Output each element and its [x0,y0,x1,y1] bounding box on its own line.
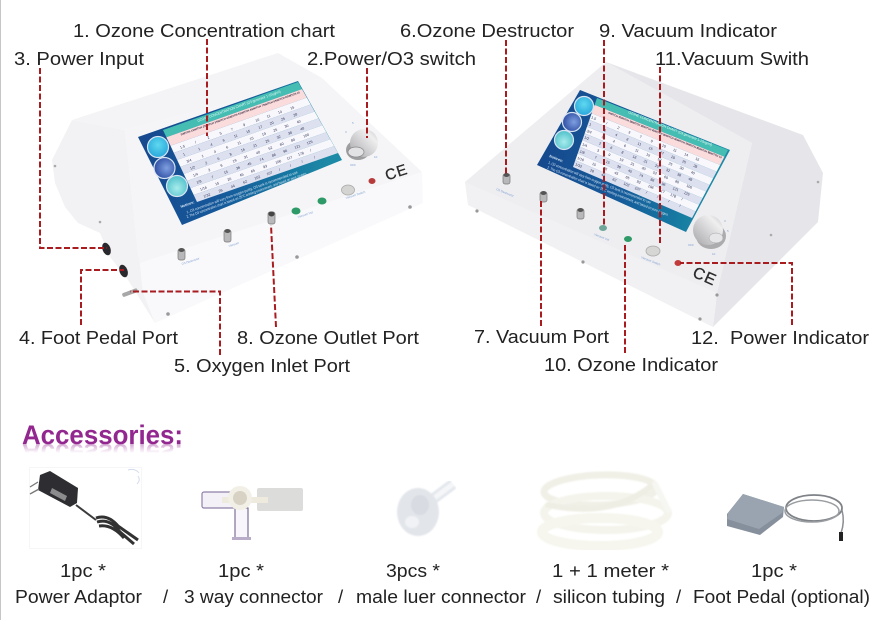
accessory quantities and names: Power Adaptor [15,586,142,607]
chart screen right: 32 [665,168,671,173]
chart screen left: 44 [230,184,235,189]
heading: accessories: Accessories: [22,438,183,468]
knob left: 5 [352,121,354,125]
knob left: 10 [374,155,378,159]
chart screen left: SWITCH 7 [251,103,264,111]
chart screen right: 1 [589,123,592,127]
chart screen left: 107 [266,171,273,176]
chart screen left: SWITCH 10 [286,90,301,99]
chart screen left: SWITCH 9 [274,95,288,103]
chart screen right: 11 [637,142,642,147]
chart screen left: 31 [243,155,249,160]
chart screen right: 26 [603,166,608,172]
chart screen left: 36 [236,166,241,171]
chart screen right: 52 [652,171,657,176]
chart screen left: 3/4 [186,158,192,164]
chart screen left: 100 [303,133,310,139]
ports and indicators left [54,165,412,316]
chart screen right: 5 [628,130,631,135]
chart screen left: 9 [220,164,223,168]
ports and indicators left: Vacuum Switch [345,190,366,200]
chart screen left: 1/16 [200,186,207,192]
chart screen left: 80 [291,138,296,143]
accessory quantities and names: male luer connector [356,586,526,607]
chart screen right: 7 [639,135,642,139]
chart screen left: 28 [293,112,298,118]
chart screen left: 15 [223,170,228,175]
chart screen left: 11 [237,141,242,146]
chart screen right: 16 [632,155,637,160]
chart screen right: 7 [594,155,597,160]
chart screen left: 30 [284,124,289,129]
chart screen right: 93 [636,180,641,185]
chart screen right: / [681,197,683,201]
chart screen right: 121 [672,186,679,192]
callout labels [14,20,869,376]
chart screen left: 60 [279,142,284,147]
accessory quantities and names: 1pc * [60,560,106,581]
chart screen left: / [313,155,316,160]
chart screen left: 4 [213,150,217,154]
chart screen left: / [290,164,292,168]
chart screen left: 7 [211,175,214,179]
chart screen left: 96 [283,149,288,154]
chart screen right: 15 [605,160,610,165]
chart screen right: SWITCH 8 [686,142,699,150]
chart screen right: 117 [658,188,665,194]
chart screen right: 6 [610,146,613,150]
chart screen left: 4 [210,143,213,147]
chart screen right: 28 [693,164,698,169]
icon: 3 way connector [202,486,303,540]
chart screen left: 11 [233,134,238,139]
chart screen left: / [301,160,303,164]
chart screen right: 107 [634,186,641,192]
chart screen right: / [656,195,659,199]
chart screen left [138,81,342,225]
chart screen left: 15 [215,181,220,186]
chart screen right: 1/8 [579,150,585,155]
chart screen right: 40 [690,170,695,176]
chart screen right: 30 [679,166,684,171]
ports and indicators right [475,173,819,321]
chart screen left: 25 [265,139,270,144]
chart screen left: OZONE CONCENTRATION CHART (O3 generator 1-10ug/ml) [197,90,281,123]
chart screen left: SWITCH 1 [180,128,194,136]
chart screen left: 65 [250,169,256,174]
chart screen right: 125 [683,191,690,197]
chart screen left: 1.5 [180,144,186,150]
chart screen left: 1/8 [196,179,202,185]
knob right: 3 [724,219,726,223]
chart screen right: 2 [598,141,602,146]
chart screen left: 17 [258,125,263,130]
chart screen left: 102 [254,175,261,181]
callout labels: 1. Ozone Concentration chart [73,20,335,41]
chart screen right: 10 [661,144,666,149]
chart screen left: 2 [205,161,208,165]
chart screen right: 3 [596,148,600,153]
chart screen right: OZONE CONCENTRATION CHART (O3 generator 1-10ug/ml) [628,110,713,147]
icon: foot pedal [727,494,843,541]
chart screen right: SWITCH 4 [641,124,655,132]
chart screen left: 14 [278,110,283,115]
knob right [688,215,729,256]
chart screen left: 6 [222,138,225,143]
chart screen right: 15 [648,146,653,151]
callout labels: 3. Power Input [14,48,144,69]
accessory quantities and names: 1pc * [751,560,797,581]
ports and indicators left: Vacuum [228,241,240,248]
chart screen right: SWITCH 7 [675,137,688,146]
chart screen left: 26 [218,188,223,193]
chart screen right: 80 [675,179,680,185]
chart screen right: SWITCH 2 [619,115,632,124]
chart screen left: 25 [281,117,286,122]
ports and indicators right: Vacuum Ind [594,232,610,242]
chart screen right: 100 [686,184,693,190]
chart screen right [537,90,730,232]
callout labels: 8. Ozone Outlet Port [237,327,419,348]
chart screen right: SWITCH 10 [708,150,723,159]
chart screen right: 60 [663,175,669,180]
accessory quantities and names: 1pc * [218,560,264,581]
chart screen right: 4 [612,139,615,144]
chart screen left: 121 [294,144,301,150]
chart screen left: SWITCH 3 [204,120,217,128]
chart screen right: 1/4 [582,143,588,148]
chart screen left: / [278,168,281,172]
chart screen left: 1 [183,152,186,157]
chart screen left: 6 [226,145,229,150]
callout labels: 5. Oxygen Inlet Port [174,355,350,376]
chart screen right: 15 [646,153,651,158]
ports and indicators left: O3 Destructor [181,256,200,266]
knob right: 10 [712,252,716,256]
chart screen left: 1 [201,154,204,158]
chart screen left: 40 [296,119,301,125]
chart screen left: 62 [243,180,248,185]
chart screen right: 2 [617,126,620,130]
chart screen left: 25 [273,128,278,133]
chart screen left: 11 [266,114,271,119]
chart screen left: 21 [253,143,258,148]
chart screen left: 8 [229,152,232,157]
chart screen right: 74 [639,173,644,178]
chart screen left: SWITCH 8 [262,99,276,107]
knob right: 5 [727,229,729,233]
chart screen right: 1/2 [584,136,590,141]
chart screen right: 25 [682,159,687,165]
chart screen left: 7 [230,127,234,132]
chart screen right: 36 [616,164,621,169]
chart screen right: / [645,191,648,195]
chart screen left: 86 [271,153,277,158]
accessory quantities and names: / [536,586,542,607]
knob right: OFF [688,243,694,247]
chart screen left: 6 [217,157,220,161]
knob left: 3 [345,130,347,134]
chart screen right: 44 [601,173,606,178]
chart screen right: 48 [688,177,693,182]
callout labels: 4. Foot Pedal Port [19,327,178,348]
chart screen right: 25 [654,164,659,169]
chart screen left: 32 [276,135,281,140]
chart screen right: 11 [634,148,639,153]
heading: accessories [22,420,183,468]
chart screen left: 125 [306,140,313,146]
chart screen left: Notices: [180,200,195,209]
accessory quantities and names: / [676,586,682,607]
chart screen right: 65 [625,175,630,180]
chart screen right: 1 [601,135,604,139]
CE mark right: CE [690,264,719,290]
accessory quantities and names: silicon tubing [553,586,665,607]
chart screen right: SWITCH 3 [630,120,643,128]
chart screen left: SWITCH 6 [239,107,252,115]
chart screen right: SWITCH 6 [663,133,677,141]
CE mark left: CE [383,161,410,184]
chart screen right: 25 [668,161,673,167]
callout labels: 6.Ozone Destructor [400,20,574,41]
chart screen right: SWITCH 1 [608,111,621,119]
chart screen left: 106 [275,159,282,165]
device: front-right view [465,62,823,327]
chart screen right: 9 [608,153,611,157]
chart screen left: SWITCH 5 [227,112,241,120]
chart screen left: 20 [269,121,274,126]
chart screen right: 20 [670,155,676,160]
chart screen right: 1 [603,128,607,133]
chart screen left: 178 [298,151,304,157]
chart screen left: 15 [249,136,254,141]
chart screen left: 1/2 [190,165,196,171]
chart screen left: 15 [290,105,295,111]
accessory quantities and names: / [338,586,344,607]
icon: silicon tubing [542,473,668,546]
heading: accessories: Accessories: [22,420,183,450]
ports and indicators right: Vacuum Switch [641,255,661,267]
chart screen right: 11 [672,148,677,153]
chart screen right: 19 [619,157,624,162]
chart screen right: 15 [695,157,700,162]
chart screen left: 117 [286,155,293,161]
chart screen left: / [195,140,197,144]
callout labels: 9. Vacuum Indicator [599,20,777,41]
chart screen right: 45 [627,169,633,174]
chart screen right: 26 [589,168,595,174]
accessory quantities and names: / [163,586,169,607]
chart screen right: Notices: [549,154,564,163]
chart screen left: 26 [227,177,232,182]
chart screen right: 106 [647,184,654,190]
chart screen left: 1/4 [193,172,199,178]
chart screen left: SWITCH 2 [192,124,205,132]
chart screen left: 48 [300,126,305,132]
chart screen left: / [310,148,312,153]
chart screen left: 74 [259,157,264,162]
leader lines [40,39,792,355]
chart screen right: SWITCH 9 [697,146,710,155]
chart screen left: 10 [255,118,260,123]
chart screen left: 1/32 [203,193,211,199]
chart screen right: 17 [659,151,664,156]
device body left [52,53,423,323]
chart screen right: 96 [661,182,666,187]
chart screen right: 8 [621,150,624,155]
chart screen right: 6 [626,137,629,142]
chart screen left: 52 [268,146,273,151]
chart screen right: 102 [623,182,630,188]
chart screen left: 9 [243,123,246,127]
chart screen right: 21 [643,159,648,164]
chart screen right: 6 [623,144,627,148]
accessory quantities and names: 1 + 1 meter * [552,560,669,581]
callout labels: 2.Power/O3 switch [307,48,476,69]
knob left [345,121,378,167]
chart screen right: SWITCH 5 [652,128,666,137]
accessory quantities and names [15,560,870,607]
callout labels: 11.Vacuum Swith [655,48,809,69]
chart screen left: 19 [261,132,267,137]
chart screen right: 1/16 [577,156,585,162]
chart screen right: 2. The O3 concentration chart is based on 25°C working environment, and based on pure oxygen. [547,166,669,217]
device: front-left view [52,53,423,323]
accessory quantities and names: 3 way connector [184,586,323,607]
chart screen right: 62 [612,177,617,182]
device body right [465,62,823,327]
chart screen left: 45 [247,162,252,167]
chart screen left: 2 [207,136,210,140]
callout labels: 10. Ozone Indicator [544,354,718,375]
chart screen right: 45 [614,171,619,176]
ports and indicators right: O3 Destructor [496,187,514,198]
icon: power adaptor [29,467,142,549]
chart screen left: SWITCH 4 [215,116,229,124]
chart screen right: 1/32 [575,163,583,169]
chart screen left: 40 [256,150,261,155]
chart screen right: 38 [677,172,682,178]
chart screen left: 38 [288,131,293,136]
chart screen left: 1 [198,147,201,151]
chart screen left: 15 [246,129,251,134]
icon: male luer connector [397,484,453,536]
chart screen left: 3 [208,168,211,172]
chart screen right: / [668,199,670,203]
chart screen right: 14 [684,152,689,158]
chart screen left: 1. O3 concentration will vary from oxygen purity, O3 tank is recommended to use [186,170,298,214]
chart screen left: 2. The O3 concentration chart is based on 25°C working environment, and based on pure oxygen. [186,171,308,219]
accessory quantities and names: Foot Pedal (optional) [693,586,870,607]
accessory quantities and names: 3pcs * [386,560,440,581]
chart screen left: 93 [263,164,268,169]
chart screen right: 15 [591,162,597,167]
chart screen left: 5 [219,131,222,136]
chart screen right: 178 [670,193,677,199]
chart screen left: 19 [232,159,237,164]
chart screen right: 19 [657,157,662,162]
callout labels: 12. Power Indicator [691,327,869,348]
chart screen right: 9 [650,139,653,144]
chart screen left: 45 [239,173,244,178]
chart screen right: 1. O3 concentration will vary from oxygen purity, O3 tank is recommended to use [548,161,651,205]
chart screen right: / [605,121,608,126]
ports and indicators left: Vacuum Ind [297,210,314,219]
knob left: OFF [350,163,356,167]
chart screen right: / [679,204,681,208]
chart screen right: 40 [641,166,646,171]
chart screen left: 16 [240,148,246,153]
chart screen right: 31 [630,162,635,167]
chart screen right: 3/4 [586,129,592,135]
chart screen right: 86 [650,178,655,183]
chart screen right: 1.5 [591,116,597,121]
chart screen right: 4 [615,133,618,137]
callout labels: 7. Vacuum Port [474,326,609,347]
